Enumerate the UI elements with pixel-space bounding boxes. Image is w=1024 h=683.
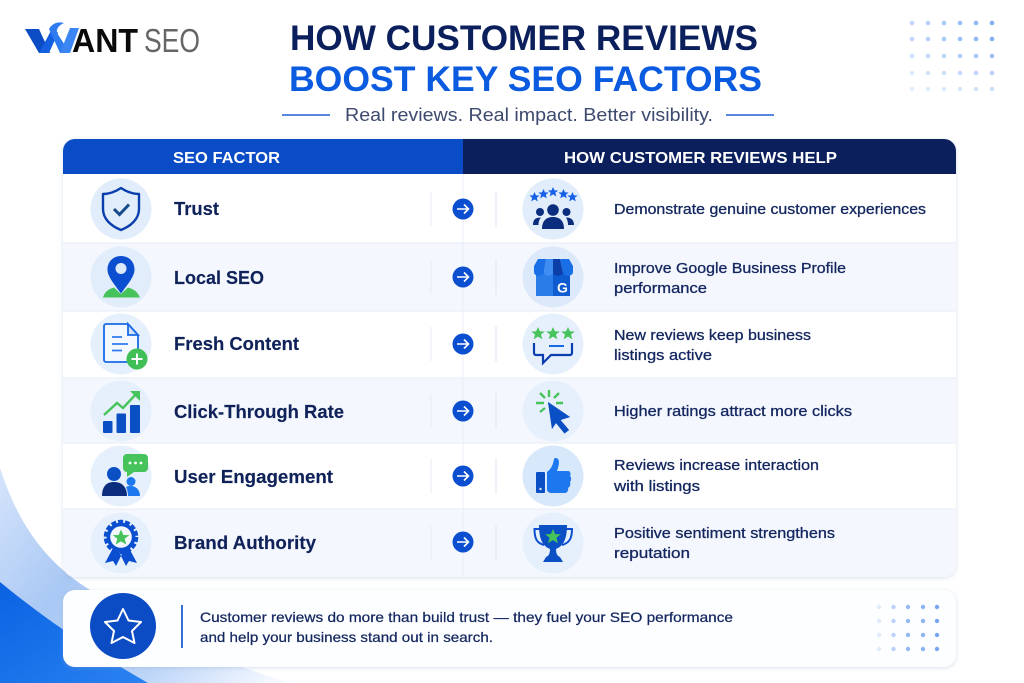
row: User Engagement: User Engagement xyxy=(174,467,333,487)
icon: award ribbon xyxy=(90,512,152,574)
icon: cursor click xyxy=(522,380,584,442)
row: Fresh Content: Fresh Content xyxy=(174,334,299,354)
row: Click-Through Rate xyxy=(90,380,852,442)
arrow xyxy=(431,259,496,295)
callout text: Customer reviews do more than build trust — they fuel your SEO performance xyxy=(200,609,733,625)
icon: reviewers and stars xyxy=(522,178,584,240)
callout text xyxy=(200,609,733,645)
icon: Google business storefront xyxy=(522,246,584,308)
row: User Engagement xyxy=(90,446,819,506)
row: Local SEO xyxy=(90,246,846,308)
icon: map pin xyxy=(90,246,152,308)
decorative dots: top right xyxy=(910,21,994,91)
table header: how customer reviews help xyxy=(463,139,956,174)
decorative dots: callout xyxy=(877,605,939,651)
arrow xyxy=(431,326,496,362)
icon: review bubble with stars xyxy=(522,314,584,374)
icon: users with chat bubble xyxy=(90,446,152,506)
row: Local SEO: Local SEO xyxy=(174,268,264,288)
arrow xyxy=(431,458,496,494)
logo: SEO xyxy=(144,22,200,59)
row: Click-Through Rate: Higher ratings attract more clicks xyxy=(614,404,852,420)
arrow xyxy=(431,393,496,429)
row: Brand Authority: Positive sentiment strengthens xyxy=(614,526,835,542)
icon: shield xyxy=(90,178,152,240)
row: Trust xyxy=(90,178,926,240)
icon: trophy xyxy=(522,512,584,574)
row: Brand Authority: Brand Authority xyxy=(174,533,316,553)
row: Trust: Demonstrate genuine customer experiences xyxy=(614,202,926,218)
background swoosh xyxy=(0,468,290,683)
title: HOW CUSTOMER REVIEWS xyxy=(290,19,758,58)
title xyxy=(289,19,762,99)
logo mark xyxy=(25,22,79,53)
table header: how customer reviews help: HOW CUSTOMER REVIEWS HELP xyxy=(564,150,837,167)
row: Fresh Content: listings active xyxy=(614,348,712,364)
callout text: and help your business stand out in search. xyxy=(200,629,493,645)
arrow xyxy=(431,525,496,561)
panel: comparison table xyxy=(63,139,956,577)
row: User Engagement: with listings xyxy=(613,479,700,495)
row: Brand Authority: reputation xyxy=(614,546,690,562)
row: User Engagement: Reviews increase interaction xyxy=(614,458,819,474)
icon: Google business storefront: G xyxy=(557,280,568,296)
logo xyxy=(25,22,200,59)
row: Local SEO: performance xyxy=(614,281,707,297)
title: BOOST KEY SEO FACTORS xyxy=(289,60,762,99)
table header: SEO factor: SEO FACTOR xyxy=(173,150,280,167)
subtitle: Real reviews. Real impact. Better visibility. xyxy=(345,105,713,125)
panel: summary callout xyxy=(63,590,956,667)
row: Fresh Content xyxy=(90,314,811,374)
icon: thumbs up xyxy=(522,446,584,506)
icon: document plus xyxy=(90,314,152,374)
row: Fresh Content: New reviews keep business xyxy=(614,328,811,344)
table header: SEO factor xyxy=(63,139,463,174)
row: Local SEO: Improve Google Business Profile xyxy=(614,261,846,277)
icon: star badge xyxy=(90,593,156,659)
row: Brand Authority xyxy=(90,512,835,574)
arrow xyxy=(431,191,496,227)
icon: growth chart xyxy=(90,380,152,442)
row: Click-Through Rate: Click-Through Rate xyxy=(174,402,344,422)
row: Trust: Trust xyxy=(174,199,219,219)
logo: ANT xyxy=(72,22,138,59)
